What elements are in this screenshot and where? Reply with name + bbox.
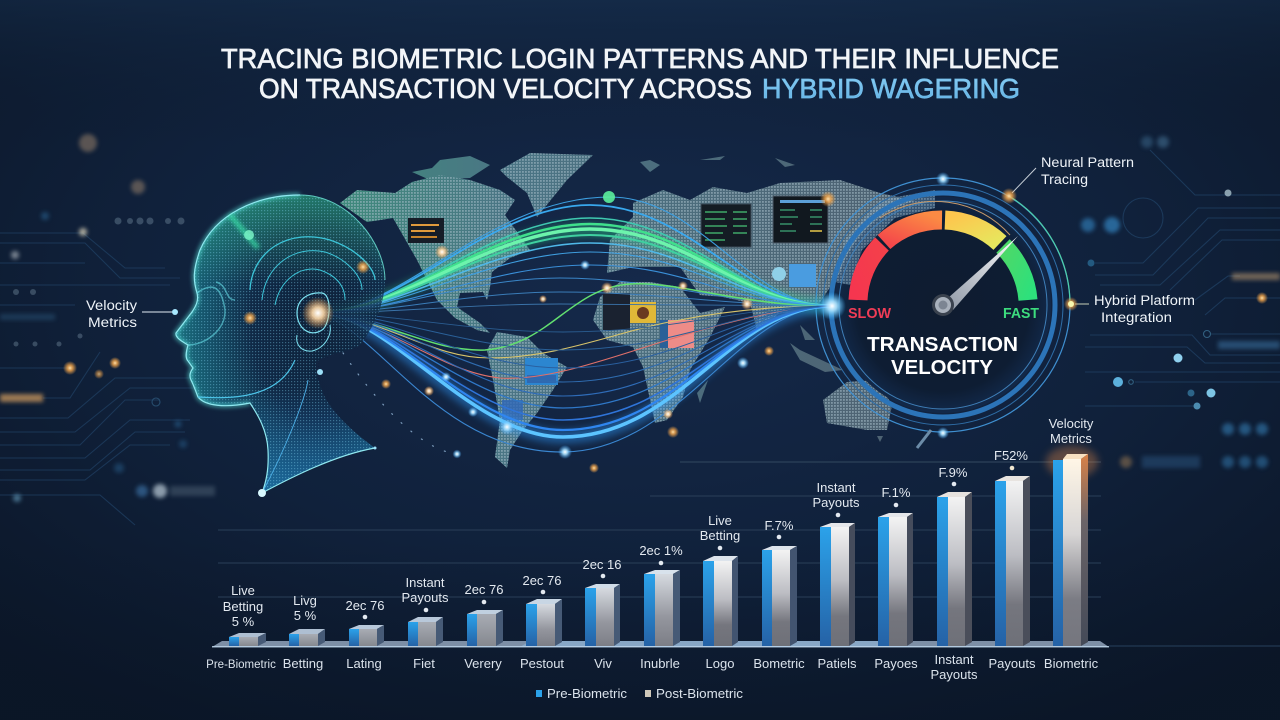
callout: neural pattern tracing: Neural Pattern xyxy=(1041,155,1134,170)
category labels: Patiels xyxy=(817,656,857,671)
value labels: Livg xyxy=(293,593,317,608)
bar 15 xyxy=(1046,446,1098,646)
bar 6 xyxy=(526,599,562,646)
value labels: F.1% xyxy=(882,485,911,500)
bar 3 xyxy=(349,625,384,646)
value labels: 2ec 76 xyxy=(522,573,562,588)
callout: neural pattern tracing: Tracing xyxy=(1041,172,1088,187)
callout: hybrid platform integration: Integration xyxy=(1101,310,1172,325)
bar chart xyxy=(206,416,1280,682)
value labels: Live xyxy=(708,513,732,528)
satellite node xyxy=(917,427,949,448)
head silhouette xyxy=(176,195,385,497)
value labels: 2ec 76 xyxy=(464,582,504,597)
bar 1 xyxy=(229,633,266,646)
bar 11 xyxy=(820,523,855,646)
category labels: Instant xyxy=(934,652,974,667)
legend: Pre-Biometric xyxy=(547,686,627,701)
value labels: F.7% xyxy=(765,518,794,533)
value labels: 2ec 76 xyxy=(345,598,385,613)
gauge rings xyxy=(816,178,1070,432)
bar 5 xyxy=(467,610,503,646)
gauge labels: TRANSACTION xyxy=(867,334,1018,356)
chart platform xyxy=(212,641,1280,648)
gauge labels: FAST xyxy=(1003,305,1039,322)
transaction velocity gauge xyxy=(816,178,1070,432)
value labels: Instant xyxy=(816,480,856,495)
category labels: Payouts xyxy=(989,656,1036,671)
world map xyxy=(340,153,935,468)
bar 8 xyxy=(644,570,680,646)
category labels: Payoes xyxy=(874,656,918,671)
callout: velocity metrics: Velocity xyxy=(86,298,137,313)
category labels: Viv xyxy=(594,656,612,671)
value labels: Instant xyxy=(405,575,445,590)
value labels: Betting xyxy=(700,528,740,543)
lower beam bundle xyxy=(318,306,832,454)
brain arcs xyxy=(198,237,375,493)
bokeh lights left xyxy=(0,134,215,502)
value labels: 2ec 16 xyxy=(582,557,622,572)
category labels: Fiet xyxy=(413,656,435,671)
gauge labels: SLOW xyxy=(848,305,892,322)
bar 13 xyxy=(937,492,972,646)
upper beam bundle xyxy=(318,197,832,313)
category labels: Pre-Biometric xyxy=(206,659,276,671)
circuit traces right xyxy=(1085,150,1280,406)
callout: neural pattern tracing xyxy=(936,155,1134,204)
value labels: Velocity xyxy=(1049,416,1094,431)
bar 7 xyxy=(585,584,620,646)
category labels: Lating xyxy=(346,656,382,671)
gauge labels: VELOCITY xyxy=(891,357,994,379)
beam nodes xyxy=(381,191,846,473)
bar 9 xyxy=(703,556,738,646)
value labels xyxy=(223,416,1094,629)
category labels: Verery xyxy=(464,656,502,671)
callout: velocity metrics: Metrics xyxy=(88,315,137,330)
circuit traces left xyxy=(0,233,200,525)
value labels: Payouts xyxy=(813,495,860,510)
bar 4 xyxy=(408,617,443,646)
bar 2 xyxy=(289,629,325,646)
face glow contours xyxy=(188,282,235,345)
bokeh lights right xyxy=(1081,136,1280,468)
legend xyxy=(536,686,744,701)
value labels: Metrics xyxy=(1050,431,1092,446)
category labels: Betting xyxy=(283,656,323,671)
value labels: Live xyxy=(231,583,255,598)
value labels: F52% xyxy=(994,448,1028,463)
green and orange crossing beams xyxy=(318,284,832,378)
gauge needle xyxy=(932,236,1018,316)
value labels: 2ec 1% xyxy=(639,543,683,558)
category labels xyxy=(206,652,1099,682)
callout: velocity metrics xyxy=(86,298,178,330)
category labels: Biometric xyxy=(1044,656,1099,671)
category labels: Pestout xyxy=(520,656,564,671)
gauge labels xyxy=(848,305,1039,379)
category labels: Logo xyxy=(706,656,734,671)
value labels: Betting xyxy=(223,599,263,614)
value labels: F.9% xyxy=(939,465,968,480)
data beams xyxy=(318,191,846,473)
value labels: 5 % xyxy=(294,608,317,623)
callout: hybrid platform integration: Hybrid Platform xyxy=(1094,293,1195,308)
legend: Post-Biometric xyxy=(656,686,744,701)
bar 10 xyxy=(762,546,797,646)
value labels: 5 % xyxy=(232,614,255,629)
bar 14 xyxy=(995,476,1030,646)
gauge arc segments xyxy=(858,220,1028,300)
title: TRACING BIOMETRIC LOGIN PATTERNS AND THEIR INFLUENCE xyxy=(221,43,1059,74)
title xyxy=(221,43,1059,104)
bar 12 xyxy=(878,513,913,646)
callout: hybrid platform integration xyxy=(1064,293,1195,325)
category labels: Bometric xyxy=(753,656,805,671)
category labels: Inubrle xyxy=(640,656,680,671)
map screens xyxy=(408,196,828,420)
beam origin glow xyxy=(302,297,334,329)
title: ON TRANSACTION VELOCITY ACROSS xyxy=(259,73,752,104)
category labels: Payouts xyxy=(931,667,978,682)
value labels: Payouts xyxy=(402,590,449,605)
title: HYBRID WAGERING xyxy=(762,73,1020,104)
